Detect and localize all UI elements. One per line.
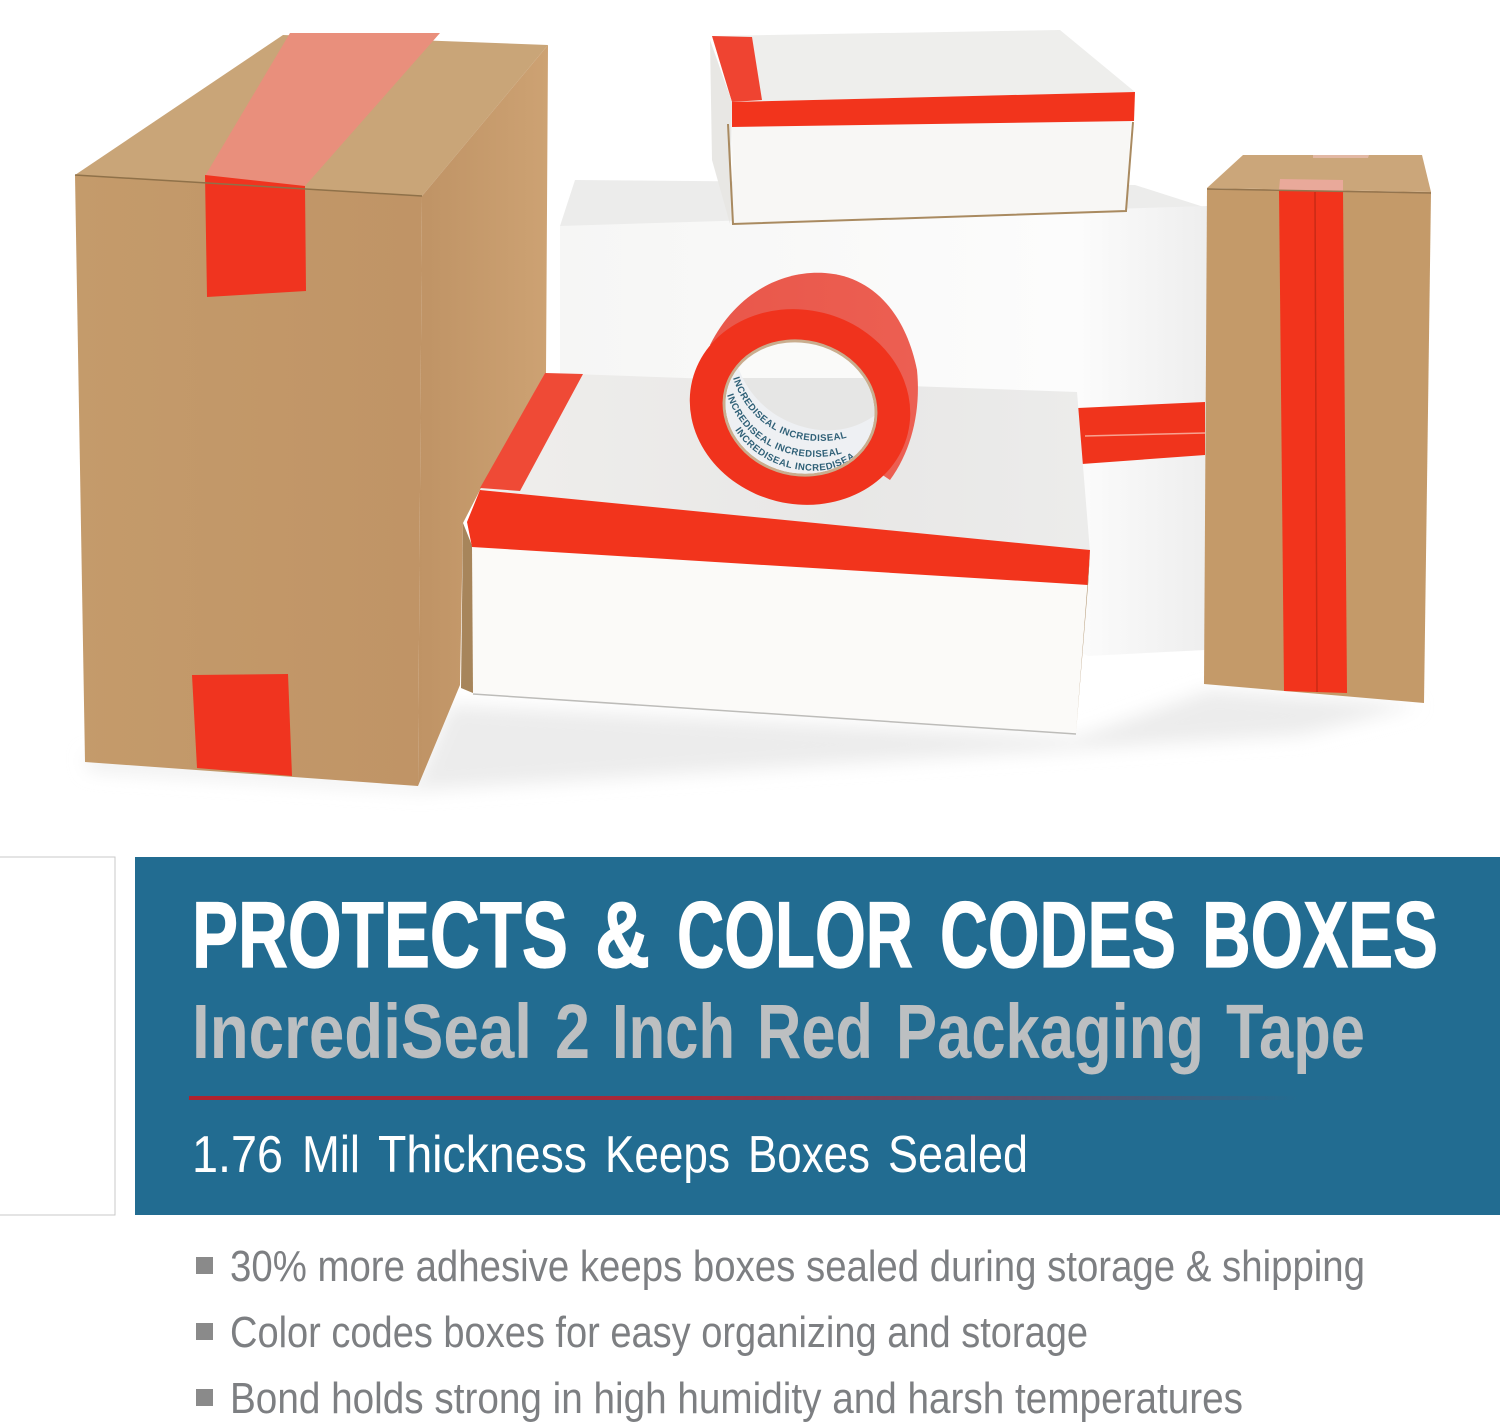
title: CODES (940, 882, 1176, 987)
core printing: INCREDISEAL INCREDISEAL (733, 376, 846, 441)
feature list (196, 1242, 1365, 1423)
white side panel (0, 857, 115, 1215)
subtitle: Packaging (896, 989, 1204, 1075)
bullet 3: Bond holds strong in high humidity and harsh temperatures (230, 1374, 1243, 1423)
core printing (727, 376, 854, 471)
bullet 2: Color codes boxes for easy organizing and storage (230, 1308, 1088, 1357)
bullet 1: 30% more adhesive keeps boxes sealed during storage & shipping (230, 1242, 1365, 1291)
subtitle: Inch (612, 989, 735, 1075)
subtitle: Red (757, 989, 873, 1075)
tagline: Sealed (888, 1126, 1028, 1184)
title: & (595, 882, 650, 987)
subtitle: 2 (555, 989, 590, 1075)
core printing: INCREDISEAL INCREDISEAL (735, 426, 854, 471)
red divider rule (189, 1096, 1299, 1100)
tall kraft box, left (75, 33, 548, 786)
tagline: Thickness (378, 1126, 587, 1184)
roll of red tape (690, 272, 918, 505)
tagline: Keeps (605, 1126, 730, 1184)
tagline: Mil (302, 1126, 360, 1184)
core printing: INCREDISEAL INCREDISEAL (727, 393, 842, 457)
title: COLOR (677, 882, 913, 987)
tagline: 1.76 (192, 1126, 283, 1184)
photo: boxes sealed with red tape (74, 30, 1431, 790)
small white box, top (710, 30, 1135, 224)
subtitle: IncrediSeal (192, 989, 532, 1075)
tagline: Boxes (748, 1126, 870, 1184)
front white box (461, 373, 1090, 734)
title: PROTECTS (192, 882, 568, 987)
large white back box (560, 180, 1207, 656)
tall kraft box, right (1204, 155, 1431, 703)
subtitle: Tape (1226, 989, 1365, 1075)
blue heading banner (135, 857, 1500, 1215)
floor shadow (85, 690, 1420, 790)
